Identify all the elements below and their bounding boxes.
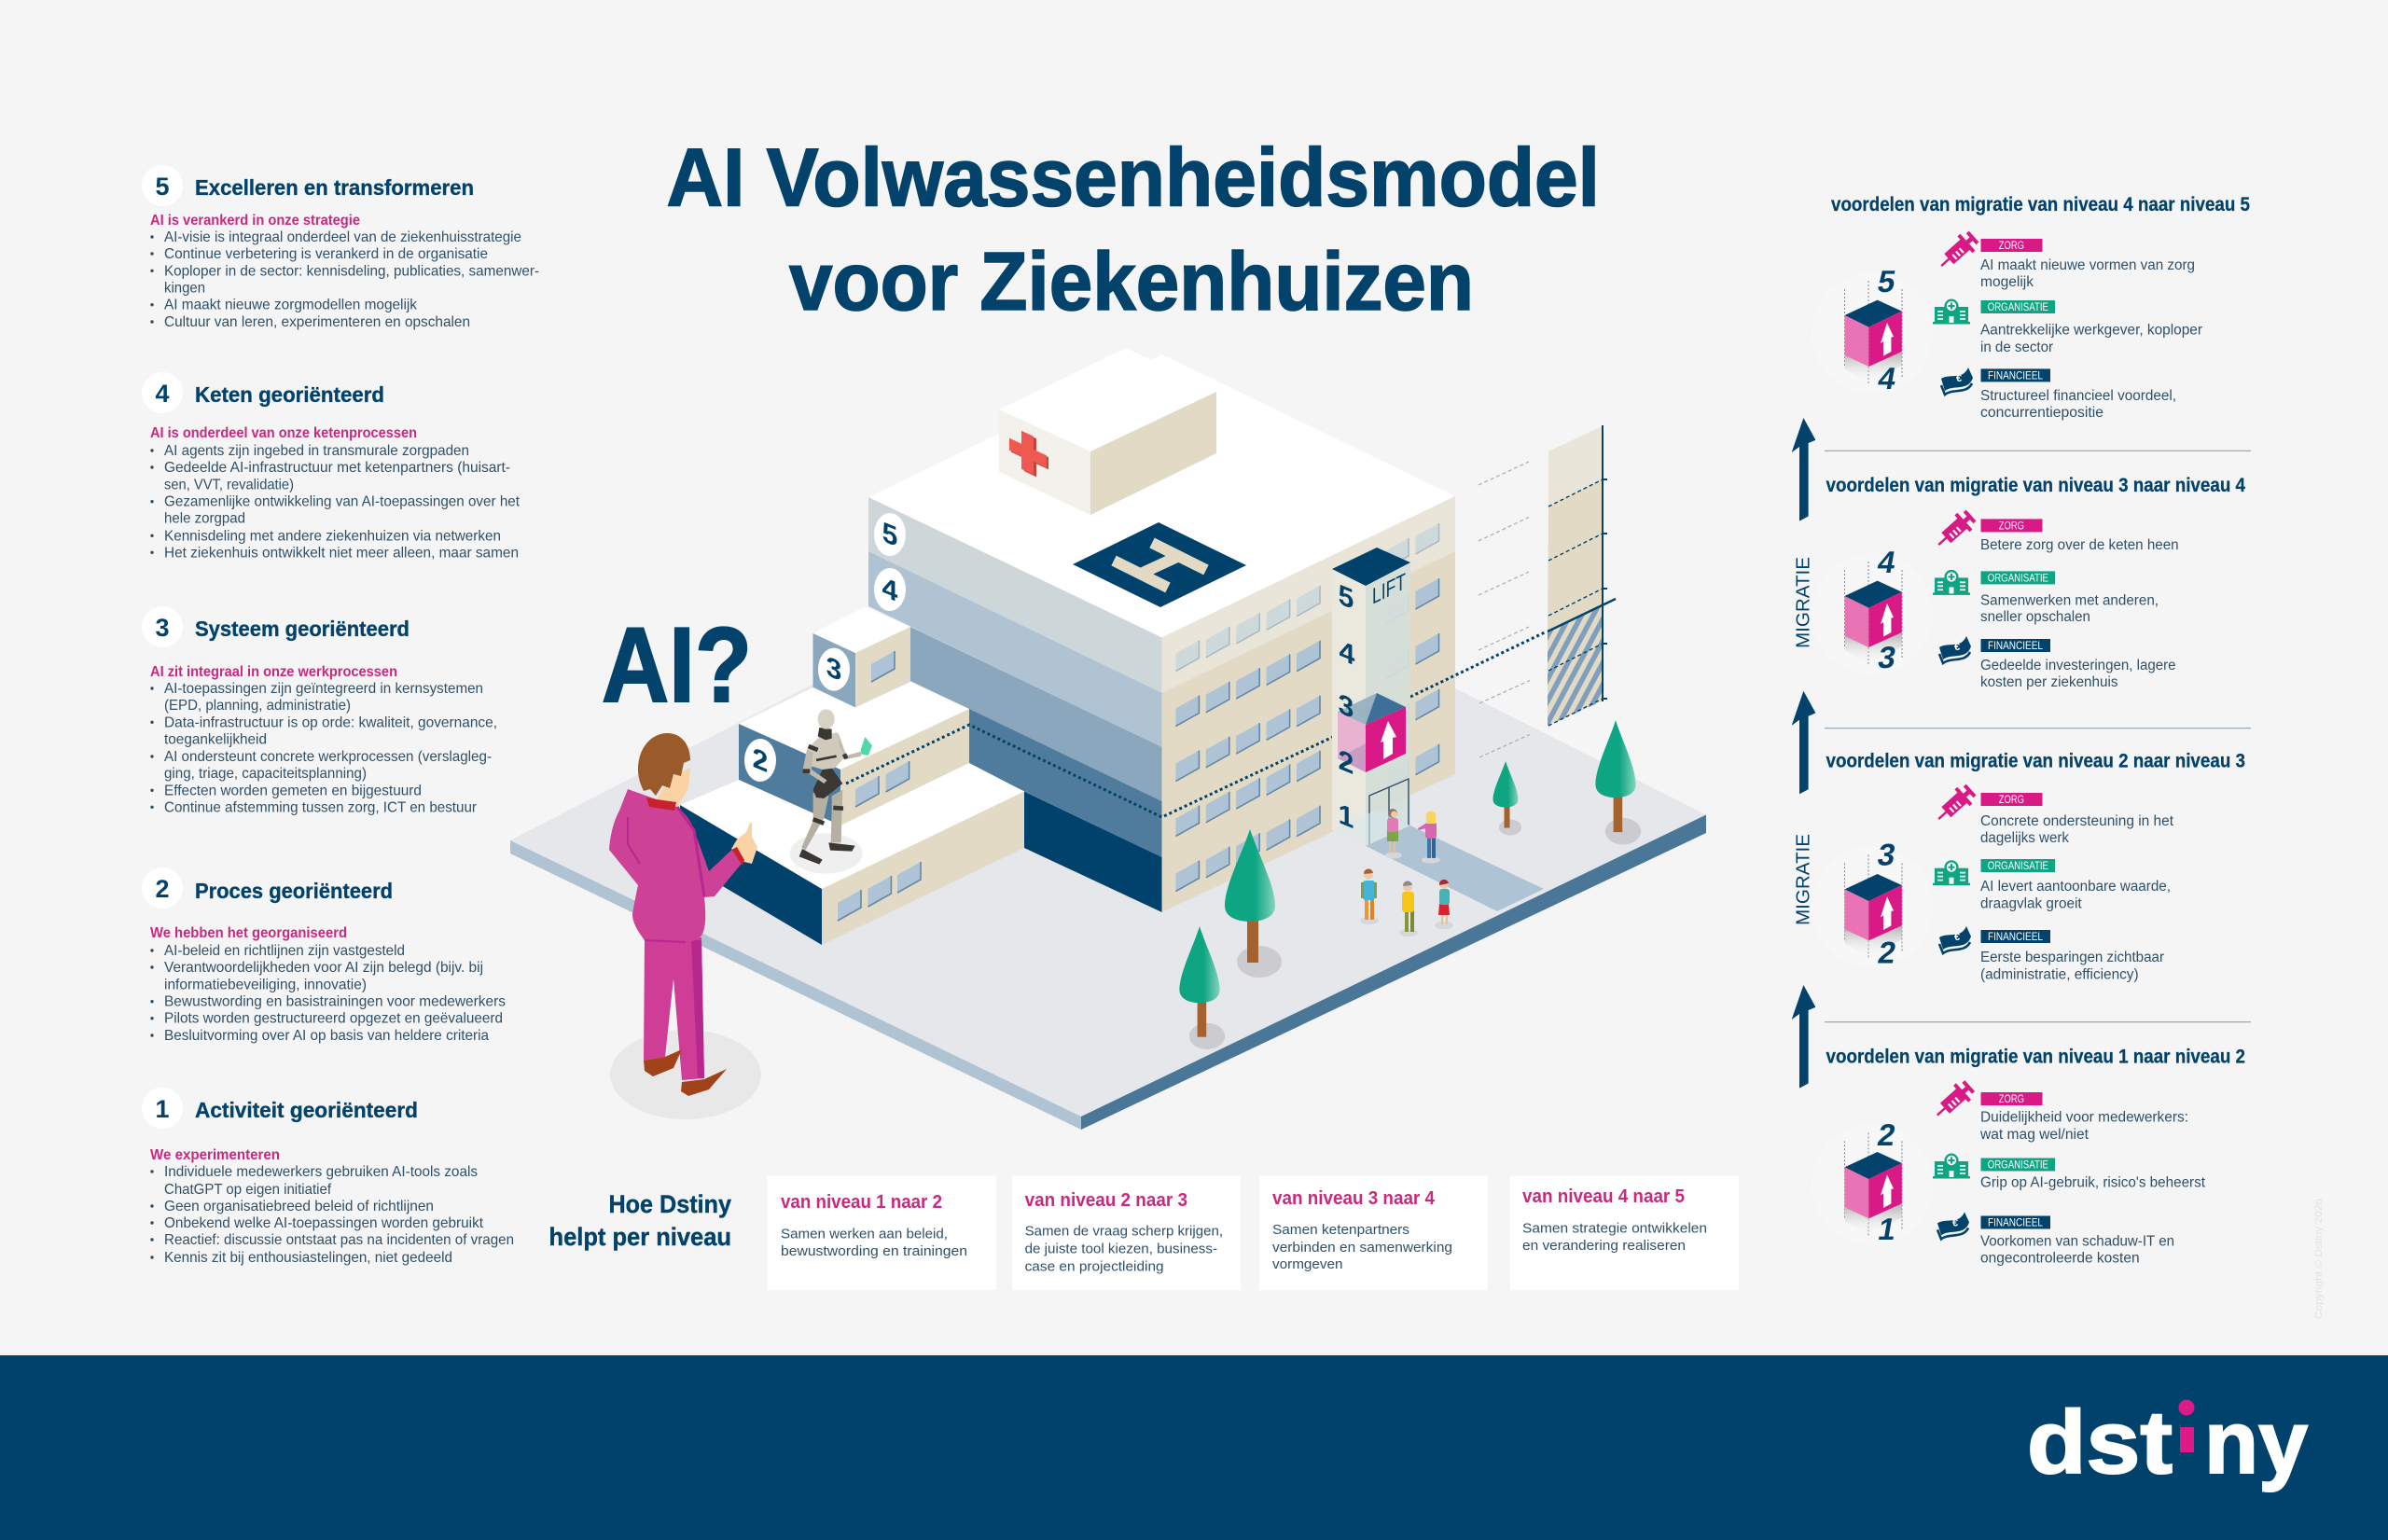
hospital building xyxy=(868,348,1455,912)
benefit zorg xyxy=(1980,813,2174,846)
arrow up xyxy=(1792,985,1815,1089)
helper heading xyxy=(548,1190,731,1251)
badge organisatie: ORGANISATIE xyxy=(1988,573,2048,584)
icon: syringe xyxy=(1931,507,1978,553)
benefit financieel: Gedeelde investeringen, lagere xyxy=(1980,658,2175,673)
benefit financieel: Structureel financieel voordeel, xyxy=(1980,388,2176,404)
benefit zorg: wat mag wel/niet xyxy=(1979,1127,2090,1143)
lift shaft xyxy=(1332,548,1410,846)
cube 1 to 2 xyxy=(1812,1118,1933,1247)
cube 2 to 3 xyxy=(1812,839,1933,971)
bullet list level 1: Geen organisatiebreed beleid of richtlijnen xyxy=(164,1199,434,1214)
card: niveau 2 naar 3: de juiste tool kiezen, business- xyxy=(1025,1241,1217,1256)
visitor woman red skirt xyxy=(1435,880,1453,929)
panel: level 4 xyxy=(142,372,521,561)
bullet list level 4: hele zorgpad xyxy=(164,511,245,527)
bullet list level 4: Kennisdeling met andere ziekenhuizen via netwerken xyxy=(164,528,501,544)
hair xyxy=(638,733,690,796)
benefit organisatie: Samenwerken met anderen, xyxy=(1980,592,2159,608)
dotted migration line xyxy=(846,631,1547,817)
card: niveau 3 naar 4: verbinden en samenwerking xyxy=(1272,1240,1452,1256)
bullet list level 4: Het ziekenhuis ontwikkelt niet meer alleen, maar samen xyxy=(164,545,519,561)
benefit organisatie xyxy=(1980,592,2159,625)
tree front xyxy=(1225,829,1282,978)
card: niveau 1 naar 2: bewustwording en trainingen xyxy=(781,1243,967,1259)
step 3: 3 xyxy=(826,650,841,687)
ground plate xyxy=(510,522,1706,1130)
cube 3 to 4 xyxy=(1812,546,1933,675)
badge zorg: ZORG xyxy=(1999,241,2024,252)
bullet list level 4: AI agents zijn ingebed in transmurale zorgpaden xyxy=(164,443,469,459)
benefit financieel: (administratie, efficiency) xyxy=(1980,966,2139,982)
panel: how Dstiny helps xyxy=(548,1176,1739,1290)
bullet list level 1 xyxy=(152,1164,514,1266)
level badge 1 xyxy=(142,1088,183,1129)
lift floor numbers: 2 xyxy=(1339,743,1354,781)
icon: syringe xyxy=(1931,782,1978,827)
card: niveau 4 naar 5: van niveau 4 naar 5 xyxy=(1522,1186,1685,1207)
lift sign: LIFT xyxy=(1372,569,1406,610)
right facade xyxy=(1162,496,1455,912)
gauge bar with hatched section xyxy=(1479,425,1616,757)
benefit zorg: Betere zorg over de keten heen xyxy=(1980,537,2179,553)
helper heading: helpt per niveau xyxy=(548,1223,731,1251)
heading level 3: Systeem georiënteerd xyxy=(195,617,410,641)
bullet list level 3: AI-toepassingen zijn geïntegreerd in kernsystemen xyxy=(164,681,483,697)
benefit organisatie: draagvlak groeit xyxy=(1980,896,2082,912)
benefit zorg: Concrete ondersteuning in het xyxy=(1980,813,2174,829)
icon: money xyxy=(1939,926,1971,953)
heading level 2: Proces georiënteerd xyxy=(195,879,393,903)
level badge 5 xyxy=(142,165,183,206)
benefit organisatie: Grip op AI-gebruik, risico's beheerst xyxy=(1980,1175,2206,1190)
bullet list level 2 xyxy=(152,943,506,1044)
icon: money xyxy=(1941,368,1973,395)
lift floor numbers: 5 xyxy=(1339,578,1354,616)
panel: level 3 xyxy=(142,606,497,815)
bullet list level 4: Gezamenlijke ontwikkeling van AI-toepassingen over het xyxy=(164,494,521,510)
section heading: voordelen van migratie van niveau 2 naar niveau 3 xyxy=(1826,750,2245,771)
visitor woman with green skirt xyxy=(1385,809,1402,858)
rooftop box with red cross xyxy=(999,348,1216,515)
bullet list level 1: Onbekend welke AI-toepassingen worden gebruikt xyxy=(164,1215,484,1231)
benefit organisatie: sneller opschalen xyxy=(1980,609,2090,625)
bullet list level 5: Continue verbetering is verankerd in de organisatie xyxy=(164,246,488,262)
walkway xyxy=(1334,810,1544,911)
section: niveau 3 naar 4 xyxy=(1812,475,2245,690)
bullet list level 1: Reactief: discussie ontstaat pas na incidenten of vragen xyxy=(164,1232,514,1248)
robot xyxy=(790,709,872,874)
card: niveau 2 naar 3: case en projectleiding xyxy=(1025,1259,1164,1274)
card: niveau 3 naar 4: vormgeven xyxy=(1272,1256,1343,1272)
icon: syringe xyxy=(1930,1077,1978,1123)
logo: dstiny: ny xyxy=(2204,1393,2308,1492)
jacket xyxy=(609,789,744,942)
badge zorg xyxy=(1981,1092,2043,1105)
subheading level 1: We experimenteren xyxy=(150,1147,280,1163)
level band 1 xyxy=(1024,791,1162,912)
level badge 4: 4 xyxy=(155,380,170,408)
bullet list level 4 xyxy=(152,443,521,561)
benefit organisatie: in de sector xyxy=(1980,340,2053,355)
bullet list level 2: informatiebeveiliging, innovatie) xyxy=(164,977,367,992)
benefit organisatie xyxy=(1980,323,2202,355)
icon: money: € xyxy=(1956,373,1962,384)
card: niveau 3 naar 4 xyxy=(1259,1176,1488,1290)
title: voor Ziekenhuizen xyxy=(789,235,1474,327)
level badge 4 on building: 4 xyxy=(882,571,898,608)
icon: hospital xyxy=(1933,860,1970,885)
benefit financieel: concurrentiepositie xyxy=(1980,405,2103,421)
badge financieel: FINANCIEEL xyxy=(1988,370,2044,382)
migration label: MIGRATIE xyxy=(1794,834,1814,925)
panel: level 2 xyxy=(142,867,506,1044)
benefit organisatie: AI levert aantoonbare waarde, xyxy=(1980,879,2171,895)
level band 2 xyxy=(969,709,1162,857)
card: niveau 4 naar 5: Samen strategie ontwikkelen xyxy=(1522,1221,1707,1237)
benefit financieel xyxy=(1980,1234,2174,1267)
level band 4 xyxy=(868,551,1162,747)
bullet list level 1: Kennis zit bij enthousiastelingen, niet gedeeld xyxy=(164,1250,452,1266)
lift floor numbers: 4 xyxy=(1340,634,1355,672)
icon: hospital xyxy=(1933,1153,1970,1179)
level badge 5: 5 xyxy=(155,173,170,201)
card: niveau 2 naar 3: van niveau 2 naar 3 xyxy=(1025,1190,1187,1211)
roof xyxy=(868,354,1455,638)
card: niveau 2 naar 3: Samen de vraag scherp krijgen, xyxy=(1025,1223,1223,1239)
card: niveau 1 naar 2: van niveau 1 naar 2 xyxy=(781,1192,942,1213)
neck and collar xyxy=(646,768,690,811)
card: niveau 1 naar 2: Samen werken aan beleid, xyxy=(781,1227,948,1242)
person in pink suit xyxy=(609,733,761,1119)
level badge 1: 1 xyxy=(155,1095,170,1123)
section: niveau 1 naar 2 xyxy=(1812,1046,2245,1267)
section heading: voordelen van migratie van niveau 1 naar niveau 2 xyxy=(1826,1046,2245,1067)
section heading: voordelen van migratie van niveau 3 naar niveau 4 xyxy=(1826,475,2245,496)
benefit organisatie xyxy=(1980,879,2171,912)
level badge 4 on building xyxy=(874,568,906,611)
panel: migration benefits xyxy=(1792,194,2251,1267)
lift door xyxy=(1369,779,1409,844)
benefit organisatie: Aantrekkelijke werkgever, koploper xyxy=(1980,323,2202,339)
title: AI Volwassenheidsmodel xyxy=(666,132,1600,224)
step 2: 2 xyxy=(753,742,768,779)
bullet list level 2: AI-beleid en richtlijnen zijn vastgesteld xyxy=(164,943,405,959)
bullet list level 5: kingen xyxy=(164,281,205,297)
subheading level 2: We hebben het georganiseerd xyxy=(150,925,347,941)
benefit zorg: AI maakt nieuwe vormen van zorg xyxy=(1980,257,2195,273)
bullet list level 5: AI maakt nieuwe zorgmodellen mogelijk xyxy=(164,298,418,313)
cube 4 to 5 xyxy=(1812,265,1933,396)
subheading level 3: AI zit integraal in onze werkprocessen xyxy=(150,664,397,680)
icon: red cross xyxy=(1009,425,1048,482)
logo: dstiny xyxy=(2027,1393,2308,1492)
subheading level 5: AI is verankerd in onze strategie xyxy=(150,213,360,229)
cube 3 to 4: 3 xyxy=(1875,641,1898,675)
visitor man yellow shirt xyxy=(1399,881,1418,936)
bullet list level 5: AI-visie is integraal onderdeel van de ziekenhuisstrategie xyxy=(164,229,521,245)
cube 1 to 2: 1 xyxy=(1875,1213,1898,1247)
badge financieel: FINANCIEEL xyxy=(1988,1218,2044,1229)
bullet list level 1: ChatGPT op eigen initiatief xyxy=(164,1182,332,1198)
badge organisatie: ORGANISATIE xyxy=(1988,861,2048,872)
arrow up xyxy=(1792,418,1815,521)
step 3 xyxy=(813,607,910,707)
bullet list level 2: Besluitvorming over AI op basis van heldere criteria xyxy=(164,1028,489,1044)
helper heading: Hoe Dstiny xyxy=(608,1190,731,1218)
icon: money: € xyxy=(1954,642,1960,653)
arrow up xyxy=(1792,691,1815,794)
migration label: MIGRATIE xyxy=(1794,557,1814,648)
icon: hospital xyxy=(1933,570,1970,595)
benefit financieel: Eerste besparingen zichtbaar xyxy=(1980,950,2164,965)
heading level 4: Keten georiënteerd xyxy=(195,382,384,407)
logo: dstiny: dst xyxy=(2027,1393,2173,1492)
icon: money xyxy=(1937,1212,1969,1239)
icon: money xyxy=(1939,636,1971,663)
cube 2 to 3: 2 xyxy=(1875,936,1898,971)
lift car with arrow xyxy=(1338,693,1406,772)
section: niveau 4 naar 5 xyxy=(1812,194,2250,421)
bullet list level 2: Verantwoordelijkheden voor AI zijn belegd (bijv. bij xyxy=(164,960,483,976)
badge zorg xyxy=(1981,793,2043,806)
benefit financieel xyxy=(1980,950,2164,982)
card: niveau 3 naar 4: van niveau 3 naar 4 xyxy=(1272,1188,1436,1209)
visitor man blue shirt xyxy=(1360,868,1379,924)
bullet list level 5: Cultuur van leren, experimenteren en opschalen xyxy=(164,314,470,330)
benefit financieel: ongecontroleerde kosten xyxy=(1980,1251,2140,1267)
bullet list level 3: Continue afstemming tussen zorg, ICT en bestuur xyxy=(164,799,478,815)
footer band xyxy=(0,1355,2388,1540)
benefit zorg xyxy=(1980,257,2195,290)
bullet list level 2: Pilots worden gestructureerd opgezet en geëvalueerd xyxy=(164,1011,503,1027)
hand pointing xyxy=(731,823,757,866)
walkway highlight xyxy=(1334,810,1410,846)
bullet list level 3: Data-infrastructuur is op orde: kwaliteit, governance, xyxy=(164,715,497,730)
badge organisatie: ORGANISATIE xyxy=(1988,1160,2048,1172)
benefit financieel xyxy=(1980,658,2175,690)
badge zorg: ZORG xyxy=(1999,795,2024,806)
bullet list level 3: Effecten worden gemeten en bijgestuurd xyxy=(164,783,422,798)
visitor woman with jeans xyxy=(1418,812,1440,864)
card: niveau 4 naar 5 xyxy=(1510,1176,1739,1290)
subheading level 4: AI is onderdeel van onze ketenprocessen xyxy=(150,425,417,441)
level band 3 xyxy=(910,627,1162,801)
step 1 xyxy=(680,763,1024,945)
benefit financieel: Voorkomen van schaduw-IT en xyxy=(1980,1234,2174,1250)
card: niveau 3 naar 4: Samen ketenpartners xyxy=(1272,1222,1409,1238)
lift floor numbers xyxy=(1339,578,1355,835)
card: niveau 2 naar 3 xyxy=(1012,1176,1241,1290)
badge financieel: FINANCIEEL xyxy=(1988,641,2044,652)
shoes xyxy=(644,1049,682,1076)
bullet list level 4: Gedeelde AI-infrastructuur met ketenpartners (huisart- xyxy=(164,460,510,476)
heading level 1: Activiteit georiënteerd xyxy=(195,1098,418,1122)
section heading: voordelen van migratie van niveau 4 naar niveau 5 xyxy=(1831,194,2250,215)
lift floor numbers: 3 xyxy=(1339,687,1354,725)
cube 4 to 5: 4 xyxy=(1875,362,1899,396)
bullet list level 3 xyxy=(152,681,497,815)
stair steps xyxy=(680,607,1024,945)
benefit financieel xyxy=(1980,388,2176,421)
lift floor numbers: 1 xyxy=(1339,798,1354,835)
bullet list level 3: AI ondersteunt concrete werkprocessen (verslagleg- xyxy=(164,749,492,765)
benefit zorg: mogelijk xyxy=(1980,274,2034,290)
badge financieel: FINANCIEEL xyxy=(1988,932,2044,943)
step 2 xyxy=(739,682,969,825)
level band 5 xyxy=(868,497,1162,693)
tree small xyxy=(1492,761,1521,836)
windows xyxy=(1175,523,1438,892)
visitors xyxy=(1360,809,1453,936)
level badge 3: 3 xyxy=(155,614,170,642)
badge organisatie: ORGANISATIE xyxy=(1988,302,2048,313)
level badge 5 on building: 5 xyxy=(882,516,897,553)
tree back right xyxy=(1595,720,1641,845)
level badge 3 xyxy=(142,606,183,647)
bullet list level 1: Individuele medewerkers gebruiken AI-tools zoals xyxy=(164,1164,478,1180)
level badge 4 xyxy=(142,372,183,413)
benefit zorg: Duidelijkheid voor medewerkers: xyxy=(1980,1110,2188,1125)
bullet list level 3: toegankelijkheid xyxy=(164,732,267,748)
bullet list level 4: sen, VVT, revalidatie) xyxy=(164,477,294,493)
cube 3 to 4: 4 xyxy=(1875,546,1898,580)
icon: syringe xyxy=(1934,229,1981,274)
bullet list level 5: Koploper in de sector: kennisdeling, publicaties, samenwer- xyxy=(164,263,539,279)
helipad xyxy=(1073,522,1246,607)
level badge 2 xyxy=(142,867,183,909)
panel: level 1 xyxy=(142,1088,514,1266)
AI? question: AI? xyxy=(602,606,752,725)
icon: money: € xyxy=(1952,1217,1958,1228)
heading level 5: Excelleren en transformeren xyxy=(195,175,474,200)
cube 4 to 5: 5 xyxy=(1875,265,1898,299)
section: niveau 2 naar 3 xyxy=(1812,750,2245,982)
title xyxy=(666,132,1600,327)
benefit financieel: kosten per ziekenhuis xyxy=(1980,674,2118,690)
bullet list level 3: (EPD, planning, administratie) xyxy=(164,698,351,714)
card: niveau 1 naar 2 xyxy=(767,1176,996,1290)
icon: money: € xyxy=(1954,932,1960,943)
trousers xyxy=(644,937,704,1080)
bullet list level 3: ging, triage, capaciteitsplanning) xyxy=(164,766,367,782)
copyright: Copyright © Dstiny 2026 xyxy=(2313,1199,2325,1319)
level badge 2: 2 xyxy=(155,875,170,903)
cube 1 to 2: 2 xyxy=(1875,1118,1898,1153)
icon: hospital xyxy=(1933,298,1970,325)
card: niveau 4 naar 5: en verandering realiseren xyxy=(1522,1238,1686,1254)
level badge 5 on building xyxy=(874,513,906,556)
illustration: isometric hospital scene xyxy=(510,348,1706,1130)
badge zorg xyxy=(1981,239,2043,252)
cube 2 to 3: 3 xyxy=(1875,839,1898,872)
badge zorg: ZORG xyxy=(1999,520,2024,532)
tree foreground xyxy=(1179,926,1225,1049)
bullet list level 2: Bewustwording en basistrainingen voor medewerkers xyxy=(164,994,506,1010)
bullet list level 5 xyxy=(152,229,539,330)
badge zorg: ZORG xyxy=(1999,1094,2024,1105)
panel: level 5 xyxy=(142,165,539,330)
benefit zorg: dagelijks werk xyxy=(1980,830,2069,846)
benefit zorg xyxy=(1979,1110,2188,1143)
badge zorg xyxy=(1981,519,2043,532)
